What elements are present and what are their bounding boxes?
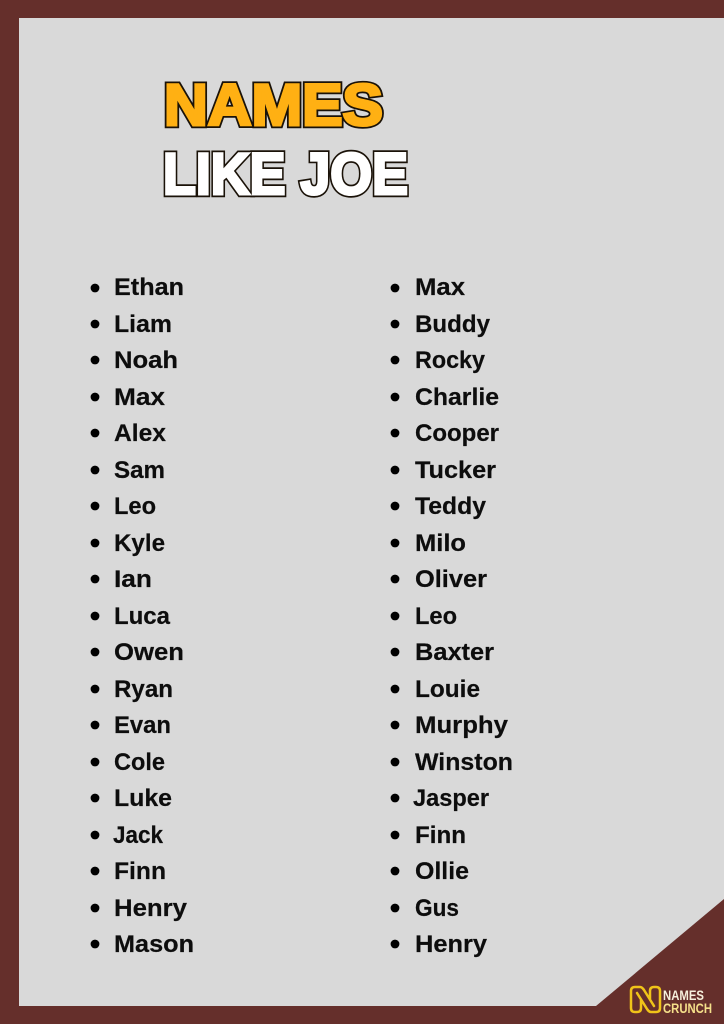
title line: NAMES: NAMES: [164, 73, 383, 138]
list: right column of names: Buddy: [415, 311, 491, 338]
list: right column of names: Ollie: [415, 858, 469, 885]
list: left column of names: Ethan: [114, 274, 184, 301]
list: right column of names: Baxter: [415, 639, 494, 666]
list: left column of names: Kyle: [114, 530, 165, 557]
logo text: CRUNCH: CRUNCH: [663, 1001, 712, 1016]
list: right column of names: Murphy: [415, 712, 509, 739]
list: left column of names: Henry: [114, 895, 188, 922]
list: right column of names: Winston: [415, 749, 513, 776]
list: left column of names: Mason: [114, 931, 194, 958]
list: right column of names: Max: [415, 274, 466, 301]
list: right column of names: Charlie: [415, 384, 499, 411]
list: left column of names: Cole: [114, 749, 165, 776]
list: right column of names: Cooper: [415, 420, 499, 447]
list: left column of names: Evan: [114, 712, 171, 739]
list: right column of names: Leo: [415, 603, 457, 630]
list: right column of names: Finn: [415, 822, 466, 849]
icon: N monogram: [631, 987, 660, 1012]
logo: Names Crunch: [631, 987, 712, 1016]
list: right column of names: Rocky: [415, 347, 486, 374]
list: left column of names: Finn: [114, 858, 166, 885]
logo text: NAMES: NAMES: [663, 988, 704, 1003]
list: left column of names: Leo: [114, 493, 156, 520]
list: right column of names: Milo: [415, 530, 466, 557]
list: left column of names: Luke: [114, 785, 172, 812]
list: left column of names: Ryan: [114, 676, 173, 703]
title line: LIKE JOE: LIKE JOE: [163, 142, 408, 207]
list: left column of names: Jack: [113, 822, 164, 849]
title line: LIKE JOE: LIKE JOE: [163, 142, 408, 207]
list: left column of names: Ian: [114, 566, 152, 593]
list: right column of names: Tucker: [415, 457, 496, 484]
list: left column of names: Alex: [114, 420, 167, 447]
title line: NAMES: NAMES: [164, 73, 383, 138]
list: right column of names: Louie: [415, 676, 480, 703]
list: right column of names: Henry: [415, 931, 488, 958]
list: right column of names: Gus: [415, 895, 459, 922]
list: left column of names: Max: [114, 384, 166, 411]
list: left column of names: [91, 274, 194, 958]
list: right column of names: [391, 274, 513, 958]
list: right column of names: Teddy: [415, 493, 487, 520]
list: left column of names: Noah: [114, 347, 178, 374]
list: left column of names: Luca: [114, 603, 171, 630]
list: right column of names: Jasper: [413, 785, 489, 812]
list: right column of names: Oliver: [415, 566, 487, 593]
list: left column of names: Sam: [114, 457, 165, 484]
list: left column of names: Owen: [114, 639, 184, 666]
list: left column of names: Liam: [114, 311, 172, 338]
title: [163, 73, 408, 207]
